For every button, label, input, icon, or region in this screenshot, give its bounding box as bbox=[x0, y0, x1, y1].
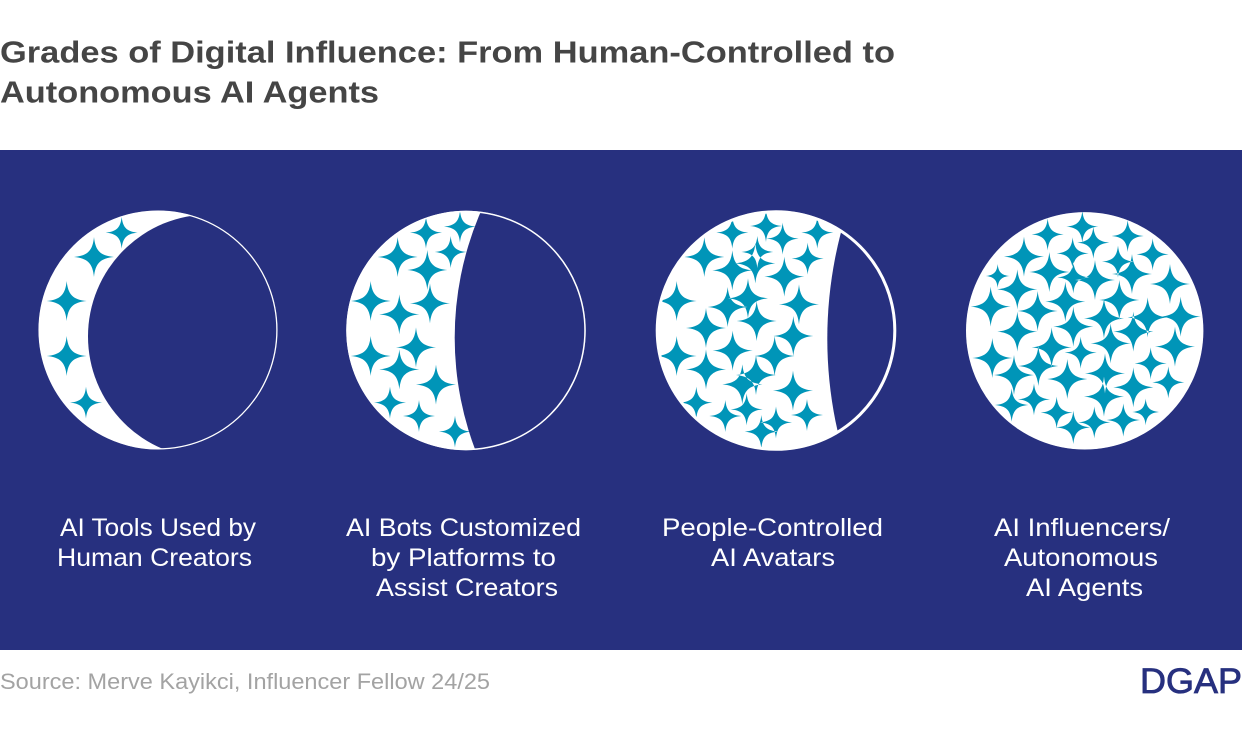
label: grade 1: Human Creators bbox=[57, 544, 252, 572]
label: grade 2: by Platforms to bbox=[371, 544, 556, 572]
label: grade 4 bbox=[994, 514, 1170, 602]
title: Autonomous AI Agents bbox=[0, 74, 379, 110]
panel: grade 1 bbox=[38, 210, 278, 566]
title bbox=[0, 34, 895, 110]
panel: grade 4 bbox=[966, 211, 1204, 602]
label: grade 3: AI Avatars bbox=[711, 544, 835, 572]
icon: half-filled circle with stars bbox=[346, 210, 586, 450]
icon: crescent with few stars bbox=[38, 210, 278, 450]
logo: DGAP: DGAP bbox=[1140, 662, 1242, 701]
label: grade 3: People-Controlled bbox=[662, 514, 883, 542]
label: grade 1 bbox=[57, 514, 257, 572]
label: grade 4: Autonomous bbox=[1004, 544, 1158, 572]
label: grade 4: AI Influencers/ bbox=[994, 514, 1170, 542]
label: grade 3 bbox=[662, 514, 883, 572]
label: grade 4: AI Agents bbox=[1026, 574, 1143, 602]
label: grade 2: AI Bots Customized bbox=[346, 514, 581, 542]
panel: grade 3 bbox=[656, 210, 896, 566]
title: Grades of Digital Influence: From Human-Controlled to bbox=[0, 34, 895, 70]
label: grade 2: Assist Creators bbox=[376, 574, 558, 602]
panel: grade 2 bbox=[346, 210, 586, 596]
label: grade 2 bbox=[346, 514, 581, 602]
source note: Source: Merve Kayikci, Influencer Fellow 24/25 bbox=[0, 669, 490, 694]
icon: mostly filled circle with stars bbox=[656, 210, 896, 451]
label: grade 1: AI Tools Used by bbox=[60, 514, 257, 542]
panel: navy background bbox=[0, 150, 1242, 650]
icon: full circle covered in stars bbox=[966, 211, 1204, 450]
